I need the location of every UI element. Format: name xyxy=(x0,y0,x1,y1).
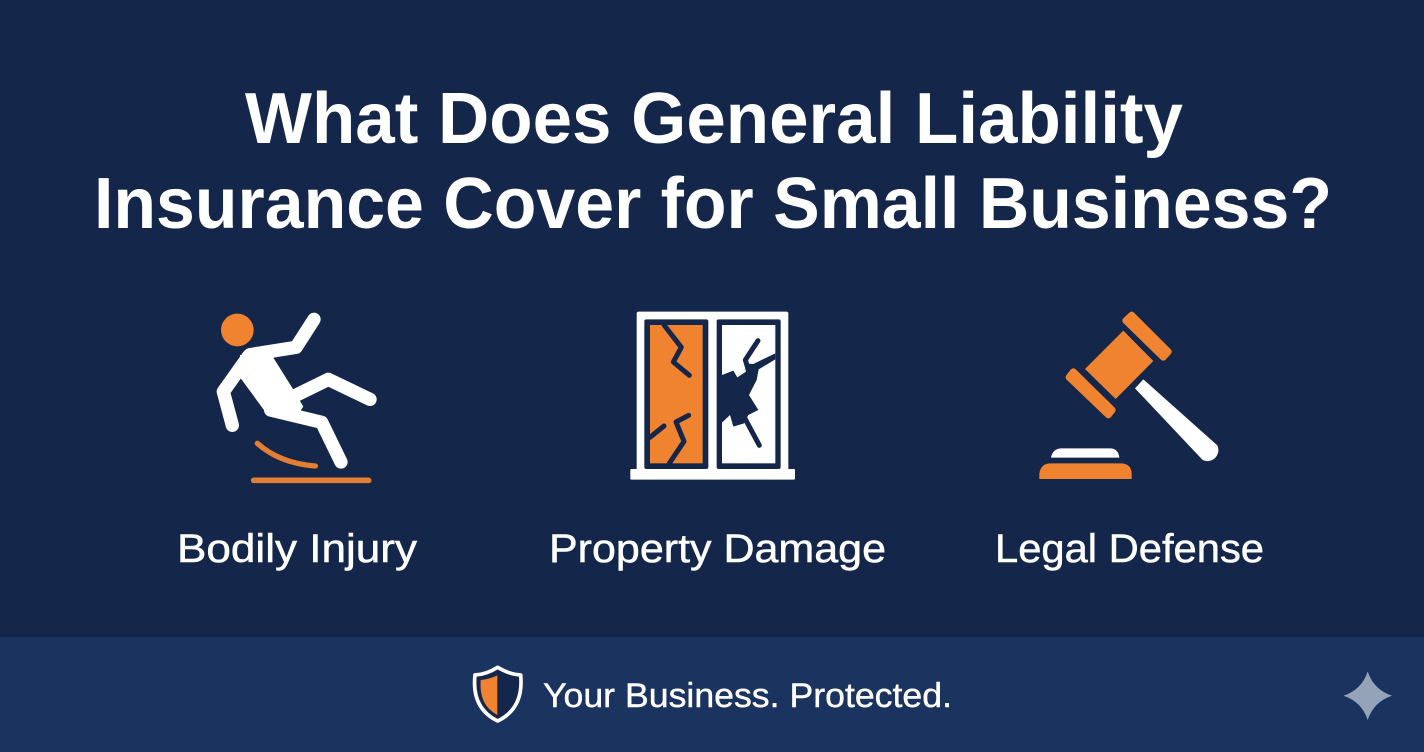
label: Bodily Injury: Bodily Injury xyxy=(177,527,417,571)
title: What Does General Liability xyxy=(245,79,1183,159)
icon: person slipping xyxy=(221,314,370,480)
label: Legal Defense: Legal Defense xyxy=(995,527,1264,571)
icon: broken window xyxy=(630,312,795,480)
icon: shield xyxy=(475,667,521,721)
footer tagline: Your Business. Protected. xyxy=(543,677,952,715)
title: Insurance Cover for Small Business? xyxy=(94,164,1332,244)
label: Property Damage: Property Damage xyxy=(549,527,886,571)
title xyxy=(94,79,1332,244)
footer band xyxy=(0,637,1424,752)
icon: sparkle xyxy=(1344,672,1392,720)
icon: gavel xyxy=(1039,315,1218,479)
